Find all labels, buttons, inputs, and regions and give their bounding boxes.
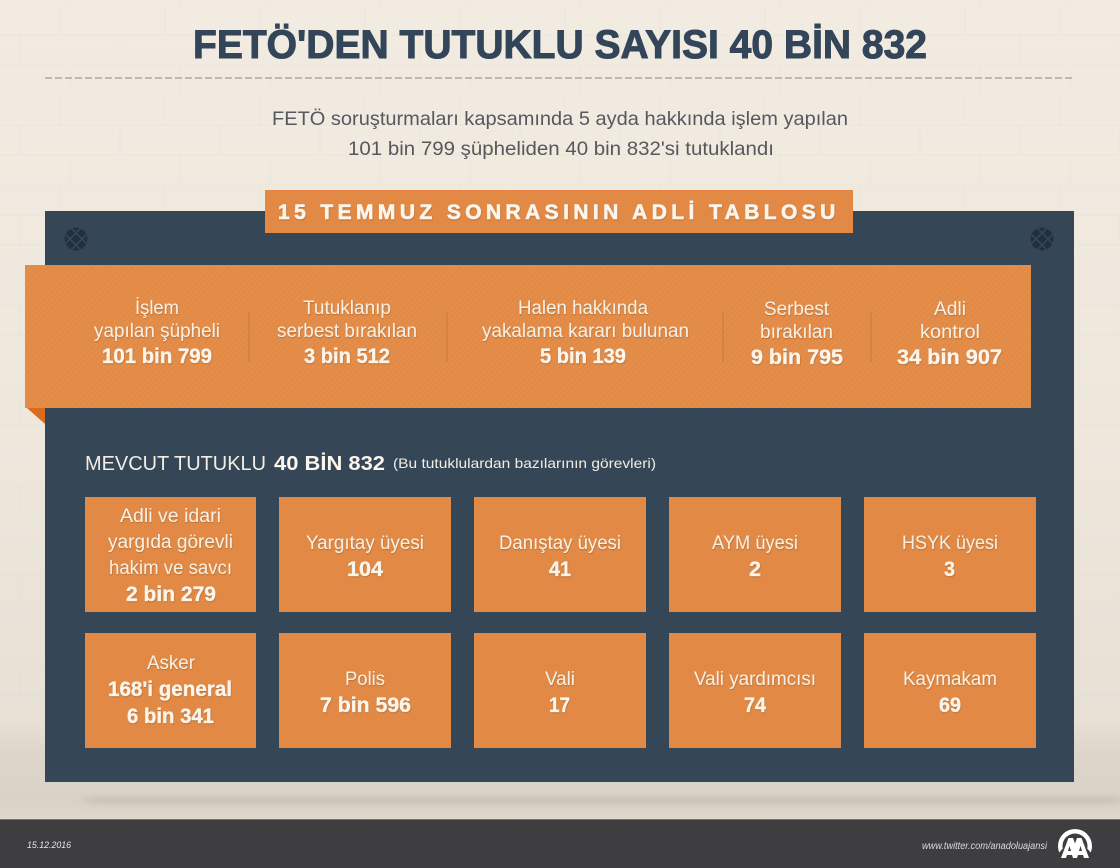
tile: hakim ve savcı: yargıda görevli: [108, 532, 233, 553]
title: FETÖ'DEN TUTUKLU SAYISI 40 BİN 832: [193, 22, 927, 67]
stat: tutuklanıp serbest bırakılan: serbest bırakılan: [277, 321, 417, 342]
tile: asker: Asker: [147, 653, 196, 674]
stat: serbest bırakılan: bırakılan: [760, 322, 833, 343]
stat: serbest bırakılan: Serbest: [764, 299, 830, 320]
tile: yargıtay üyesi: 104: [347, 558, 383, 581]
tile: asker: 168'i general: [108, 678, 232, 701]
tile: vali: Vali: [545, 669, 575, 690]
stat: işlem yapılan şüpheli: [94, 298, 220, 368]
tile: kaymakam: 69: [939, 694, 961, 717]
heading: mevcut tutuklu: MEVCUT TUTUKLU: [85, 453, 266, 475]
stat: işlem yapılan şüpheli: 101 bin 799: [102, 345, 212, 368]
tile: vali yardımcısı: Vali yardımcısı: [694, 669, 816, 690]
tile: hakim ve savcı: hakim ve savcı: [109, 558, 232, 579]
icon: AA logo: [1058, 829, 1092, 858]
tile: aym üyesi: 2: [749, 558, 761, 581]
tile: hakim ve savcı: 2 bin 279: [126, 583, 216, 606]
heading: mevcut tutuklu: [85, 452, 656, 475]
stat: tutuklanıp serbest bırakılan: 3 bin 512: [304, 345, 390, 368]
tile: yargıtay üyesi: [279, 497, 451, 612]
tile: hsyk üyesi: 3: [944, 558, 955, 581]
tile: aym üyesi: AYM üyesi: [712, 533, 798, 554]
stat: serbest bırakılan: 9 bin 795: [751, 346, 843, 369]
tile: danıştay üyesi: [474, 497, 646, 612]
date: 15.12.2016: [27, 840, 71, 850]
stat: adli kontrol: kontrol: [920, 322, 980, 343]
subtitle: [272, 108, 848, 160]
panel: adli tablo: [25, 190, 1074, 782]
tile: aym üyesi: [669, 497, 841, 612]
tile: yargıtay üyesi: Yargıtay üyesi: [306, 533, 424, 554]
tile: kaymakam: Kaymakam: [903, 669, 997, 690]
tile: hakim ve savcı: [85, 497, 256, 612]
heading: mevcut tutuklu: 40 BİN 832: [274, 452, 385, 475]
tile: danıştay üyesi: 41: [549, 558, 571, 581]
stat: adli kontrol: [897, 299, 1002, 369]
tile: asker: 6 bin 341: [127, 705, 214, 728]
tile: kaymakam: [864, 633, 1036, 748]
source url: www.twitter.com/anadoluajansi: [922, 841, 1048, 852]
tile: asker: [85, 633, 256, 748]
banner: 15 TEMMUZ SONRASININ ADLİ TABLOSU: [278, 201, 840, 224]
stat: yakalama kararı: [482, 298, 689, 368]
ribbon: summary figures: [25, 265, 1031, 408]
ribbon fold: [27, 408, 45, 424]
stat: adli kontrol: Adli: [934, 299, 966, 320]
tile: polis: 7 bin 596: [320, 694, 411, 717]
stat: tutuklanıp serbest bırakılan: Tutuklanıp: [303, 298, 391, 319]
tile: vali yardımcısı: [669, 633, 841, 748]
tile: vali: [474, 633, 646, 748]
icon: left rivet: [64, 228, 88, 250]
stat: tutuklanıp serbest bırakılan: [277, 298, 417, 368]
heading: mevcut tutuklu: (Bu tutuklulardan bazılarının görevleri): [393, 455, 656, 471]
tile: vali yardımcısı: 74: [744, 694, 766, 717]
tile: hsyk üyesi: [864, 497, 1036, 612]
stat: yakalama kararı: 5 bin 139: [540, 345, 626, 368]
stat: adli kontrol: 34 bin 907: [897, 346, 1002, 369]
tile: hsyk üyesi: HSYK üyesi: [902, 533, 998, 554]
footer bar: [0, 819, 1120, 868]
subtitle: FETÖ soruşturmaları kapsamında 5 ayda hakkında işlem yapılan: [272, 108, 848, 130]
stat: serbest bırakılan: [751, 299, 843, 369]
title divider: [45, 77, 1075, 79]
stat: yakalama kararı: yakalama kararı bulunan: [482, 321, 689, 342]
tile: polis: Polis: [345, 669, 385, 690]
tile: hakim ve savcı: Adli ve idari: [120, 506, 221, 527]
stat: işlem yapılan şüpheli: İşlem: [135, 298, 179, 319]
tile: polis: [279, 633, 451, 748]
icon: right rivet: [1030, 228, 1054, 250]
stat: yakalama kararı: Halen hakkında: [518, 298, 648, 319]
subtitle: 101 bin 799 şüpheliden 40 bin 832'si tutuklandı: [348, 138, 774, 160]
tile: danıştay üyesi: Danıştay üyesi: [499, 533, 621, 554]
stat: işlem yapılan şüpheli: yapılan şüpheli: [94, 321, 220, 342]
banner: [265, 190, 853, 233]
tile: vali: 17: [549, 694, 570, 717]
